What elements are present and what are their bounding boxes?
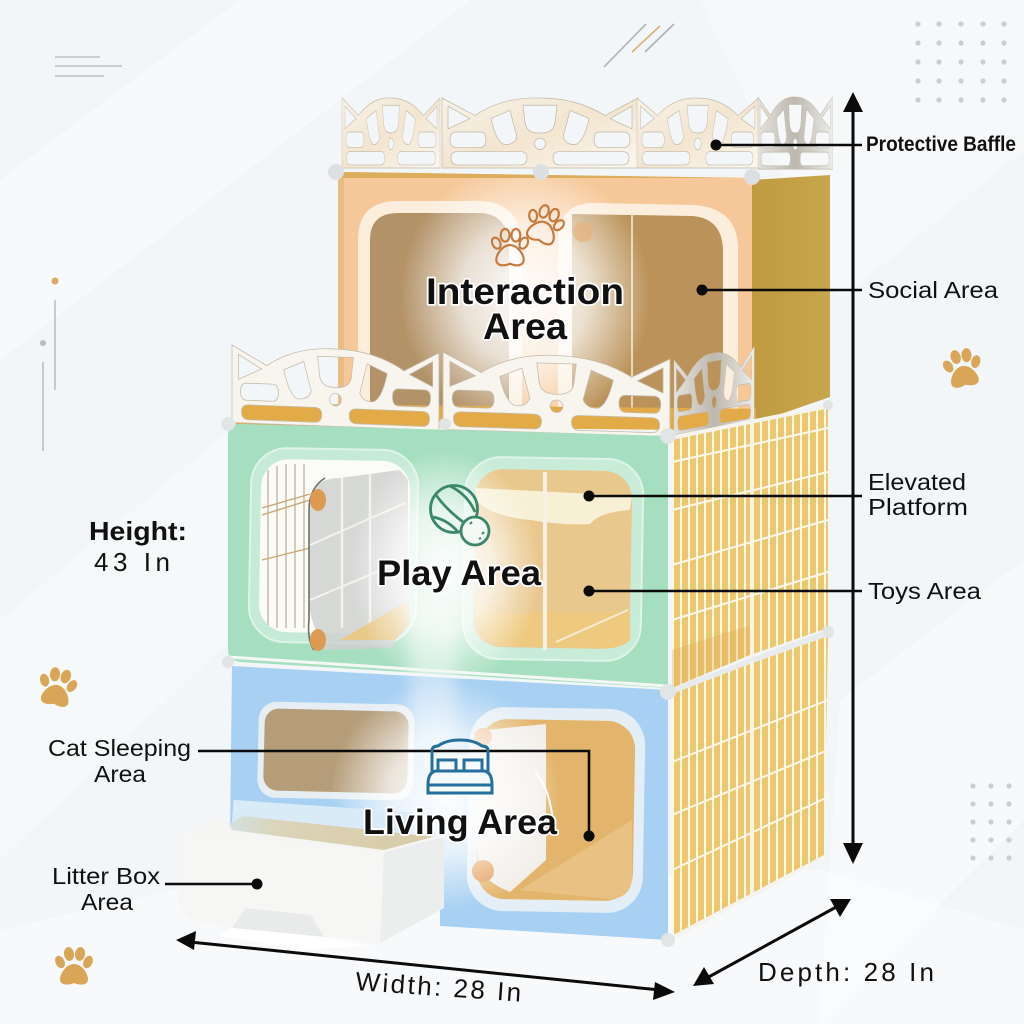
label: Elevated Platform	[868, 469, 968, 520]
label: Elevated Platform: Platform	[868, 494, 968, 520]
heading: Play Area: Play Area	[377, 554, 542, 593]
drawer side	[380, 837, 444, 943]
right window frame	[462, 456, 644, 662]
litter	[212, 816, 445, 856]
yellow ledge behind lower baffle	[236, 403, 756, 431]
side wall	[752, 175, 830, 424]
label: Litter Box Area	[52, 863, 161, 915]
label: Height: 43 In	[94, 547, 170, 577]
label: Cat Sleeping Area: Cat Sleeping	[48, 735, 191, 761]
lower baffles	[232, 345, 754, 437]
icon: interaction paws	[490, 200, 569, 265]
callouts: lines and dots	[165, 140, 862, 890]
label: Social Area: Social Area	[868, 277, 998, 303]
icon: paw bottom left	[53, 946, 95, 985]
arrow: width	[176, 931, 675, 1000]
panel: side grid upper	[670, 406, 832, 692]
panel: interaction tier	[338, 172, 830, 419]
panel: living tier	[224, 664, 674, 944]
heading: Interaction Area: Area	[483, 306, 567, 347]
label: Cat Sleeping Area: Area	[94, 761, 146, 787]
baffle joints	[328, 164, 760, 185]
icon: paw left	[33, 664, 82, 710]
right window frame	[466, 706, 646, 914]
heading: Living Area: Living Area	[363, 803, 558, 842]
decoration: top left lines	[55, 57, 122, 76]
icon: bed	[427, 740, 493, 795]
arrow: height	[843, 92, 863, 864]
left window frame	[248, 448, 419, 644]
heading: Interaction Area	[426, 271, 624, 347]
left window	[263, 708, 409, 794]
right window	[472, 719, 636, 901]
panel: side grid lower	[668, 636, 828, 940]
panel: litter drawer	[178, 816, 445, 950]
panel: play tier	[220, 420, 670, 700]
right window	[472, 469, 633, 650]
label: Height	[89, 516, 187, 577]
decoration: lower right dot grid	[970, 783, 1012, 861]
handle	[232, 908, 324, 937]
left window	[258, 459, 410, 651]
top protective baffles	[342, 97, 832, 169]
arrow: depth	[693, 899, 851, 986]
label: Elevated Platform: Elevated	[868, 469, 966, 495]
icon: ball	[430, 486, 489, 545]
label: Height: Height:	[89, 516, 187, 546]
decoration: diagonal strokes	[604, 24, 674, 67]
label: Width: Width: 28 In	[355, 966, 522, 1008]
label: Litter Box Area: Litter Box	[52, 863, 161, 889]
drawer front	[178, 832, 384, 945]
decoration: left dots and lines	[40, 278, 58, 451]
icon: paw right	[939, 345, 986, 390]
door knob	[573, 222, 593, 242]
label: Litter Box Area: Area	[81, 889, 133, 915]
decoration: top right dot grid	[915, 21, 1007, 103]
heading: Interaction Area: Interaction	[426, 271, 624, 312]
label: Toys Area: Toys Area	[868, 578, 981, 604]
label: Depth: Depth: 28 In	[758, 957, 934, 987]
corner joints	[221, 400, 834, 947]
left window frame	[257, 701, 415, 801]
label: Cat Sleeping Area	[48, 735, 191, 787]
